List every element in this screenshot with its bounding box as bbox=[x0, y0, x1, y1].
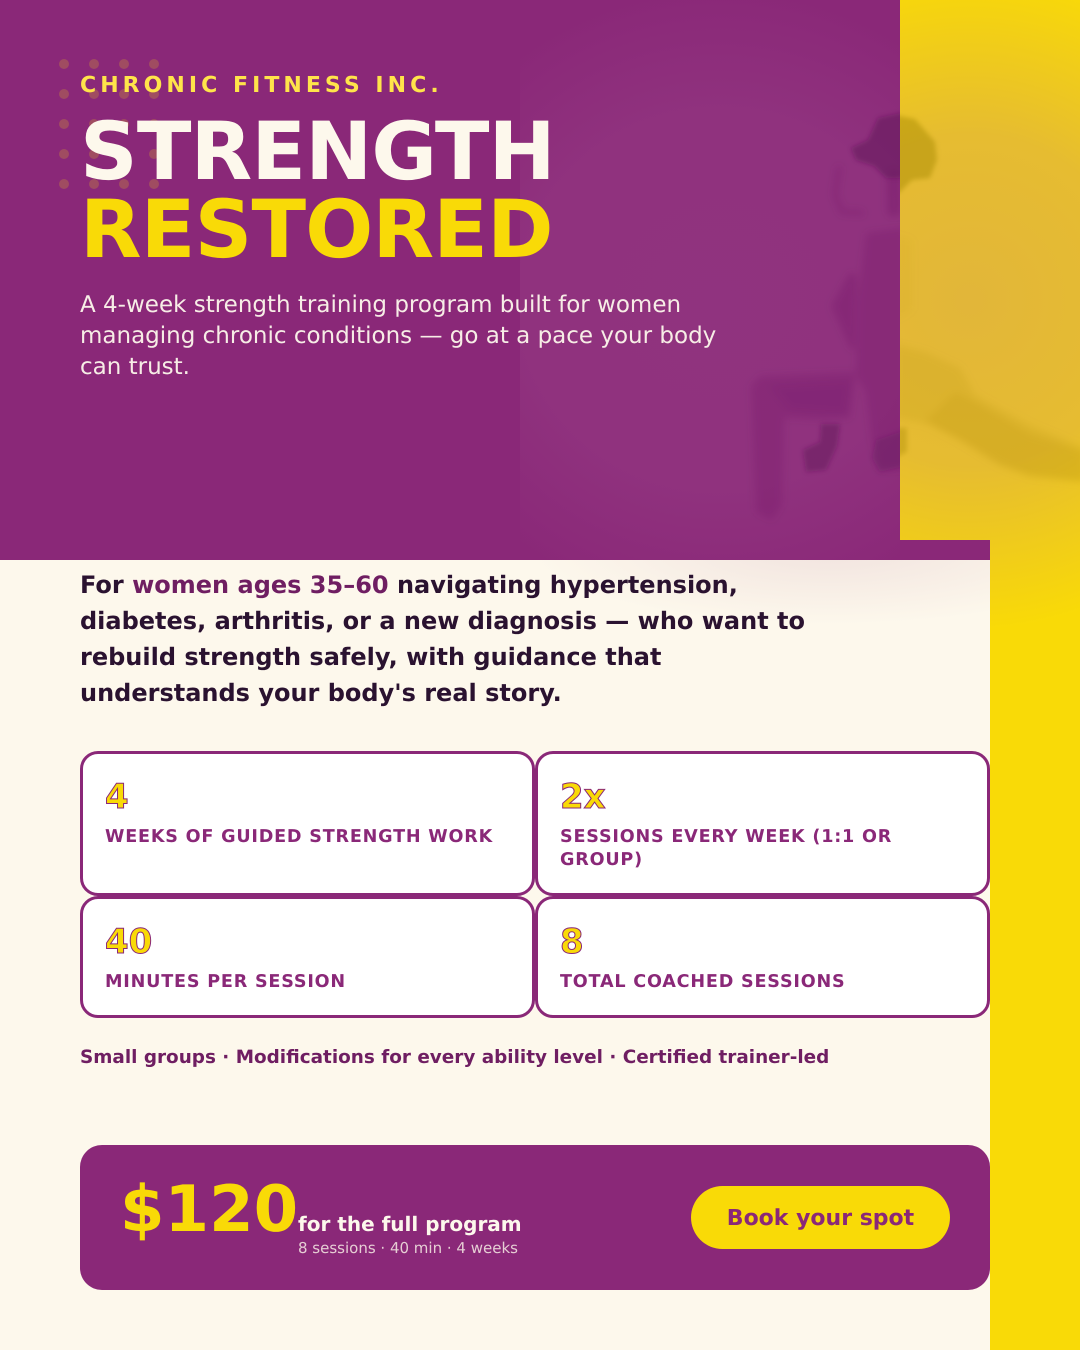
stat number: 4 bbox=[105, 777, 129, 817]
decorative dot grid bbox=[59, 59, 159, 189]
stat number: 2x bbox=[560, 777, 606, 817]
hero subtitle: A 4-week strength training program built for women bbox=[80, 292, 681, 318]
dumbbell right bbox=[873, 432, 900, 471]
arm bbox=[836, 279, 854, 336]
photo tint on purple bbox=[520, 88, 900, 510]
figure on purple bbox=[760, 112, 900, 472]
photo tint on cream bbox=[653, 560, 990, 596]
stat card: total sessions bbox=[535, 896, 990, 1018]
title: RESTORED bbox=[80, 183, 553, 276]
hero yellow block bbox=[900, 0, 1080, 540]
brand eyebrow: CHRONIC FITNESS INC. bbox=[80, 73, 443, 98]
photo tint on yellow bbox=[900, 0, 1080, 640]
hero subtitle: can trust. bbox=[80, 354, 190, 380]
audience statement: diabetes, arthritis, or a new diagnosis — who want to bbox=[80, 607, 805, 635]
stat label: WEEKS OF GUIDED STRENGTH WORK bbox=[105, 827, 493, 847]
hair bbox=[851, 112, 905, 178]
button: book your spot: Book your spot bbox=[727, 1206, 914, 1231]
price: $120 bbox=[120, 1173, 298, 1247]
audience statement: rebuild strength safely, with guidance that bbox=[80, 643, 661, 671]
title bbox=[80, 105, 555, 276]
body silhouette bbox=[760, 239, 897, 466]
price description: for the full program bbox=[298, 1212, 522, 1236]
stat number: 8 bbox=[560, 922, 584, 962]
button: book your spot bbox=[691, 1186, 950, 1249]
hero subtitle: managing chronic conditions — go at a pace your body bbox=[80, 323, 716, 349]
stat card: weeks bbox=[80, 751, 535, 896]
hero panel bbox=[0, 0, 990, 560]
audience statement: understands your body's real story. bbox=[80, 679, 562, 707]
program features note: Small groups · Modifications for every ability level · Certified trainer-led bbox=[80, 1047, 829, 1068]
dumbbell left bbox=[803, 424, 840, 472]
thigh shading bbox=[770, 382, 850, 414]
stat number: 40 bbox=[105, 922, 152, 962]
stat label: SESSIONS EVERY WEEK (1:1 OR GROUP) bbox=[560, 827, 892, 870]
figure on yellow bbox=[895, 115, 1080, 482]
stat card: sessions per week bbox=[535, 751, 990, 896]
stat label: TOTAL COACHED SESSIONS bbox=[560, 972, 845, 992]
stat card: minutes bbox=[80, 896, 535, 1018]
price details: 8 sessions · 40 min · 4 weeks bbox=[298, 1239, 518, 1257]
hero subtitle bbox=[80, 292, 716, 380]
audience statement bbox=[80, 571, 805, 707]
right yellow column bbox=[990, 0, 1080, 1350]
stat label: MINUTES PER SESSION bbox=[105, 972, 346, 992]
title: STRENGTH bbox=[80, 105, 555, 198]
hair bbox=[900, 114, 938, 193]
face outline bbox=[835, 168, 862, 213]
hero photo: woman exercising with dumbbells bbox=[520, 2, 1080, 598]
audience statement: For women ages 35–60 navigating hypertension, bbox=[80, 571, 738, 599]
pricing panel bbox=[80, 1145, 990, 1290]
